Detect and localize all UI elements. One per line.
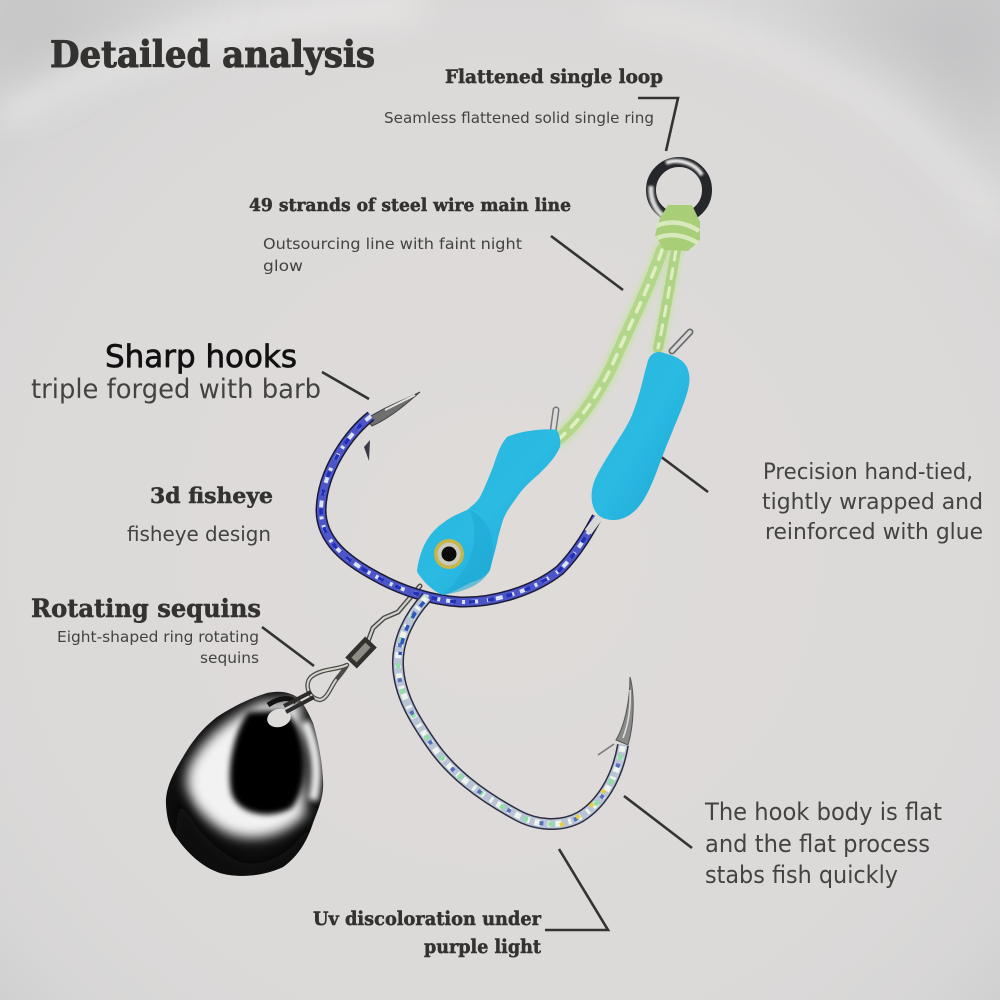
label: flattened single loop <box>384 66 663 127</box>
label: hand-tied <box>762 460 983 545</box>
label: flat hook body: stabs fish quickly <box>705 861 898 889</box>
leader line: sharp hooks <box>322 372 369 399</box>
label: flat hook body <box>704 798 942 889</box>
label: main line: glow <box>263 257 303 275</box>
label: 3d fisheye: fisheye design <box>127 522 271 546</box>
label: hand-tied: tightly wrapped and <box>762 490 983 515</box>
icon: metal loop ring <box>651 161 707 218</box>
icon: blue wrap upper <box>592 352 689 520</box>
label: sharp hooks: triple forged with barb <box>31 374 321 405</box>
label: rotating sequins: Rotating sequins <box>31 594 261 623</box>
label: main line: 49 strands of steel wire main line <box>249 195 571 216</box>
label: rotating sequins: Eight-shaped ring rotating <box>57 628 259 646</box>
leader line: hook body <box>624 796 692 848</box>
label: rotating sequins <box>31 594 261 667</box>
label: flat hook body: The hook body is flat <box>704 798 942 826</box>
leader line: sequins <box>262 627 314 666</box>
leader line: uv <box>545 849 608 930</box>
label: hand-tied: reinforced with glue <box>765 520 983 545</box>
label: main line: Outsourcing line with faint night <box>263 235 522 253</box>
leader line: loop <box>638 98 678 151</box>
label: 3d fisheye <box>127 483 273 546</box>
icon: main line strands <box>560 250 676 438</box>
title: Detailed analysis <box>50 34 375 76</box>
icon: knot <box>655 205 700 251</box>
label: uv discoloration: Uv discoloration under <box>313 908 542 930</box>
icon: spoon blade <box>166 692 324 876</box>
label: uv discoloration <box>313 908 542 958</box>
leader line: main line <box>551 236 623 290</box>
label: flat hook body: and the flat process <box>705 830 930 858</box>
icon: needle stubs <box>553 332 690 432</box>
label: hand-tied: Precision hand-tied, <box>763 460 973 485</box>
icon: blue head with fisheye <box>417 429 560 595</box>
icon: fisheye <box>434 539 464 569</box>
label: flattened single loop: Flattened single loop <box>445 66 663 88</box>
label: 3d fisheye: 3d fisheye <box>150 483 273 508</box>
label: sharp hooks <box>31 339 321 405</box>
label: rotating sequins: sequins <box>200 649 259 667</box>
icon: swivel and wire <box>284 586 420 712</box>
leader line: hand-tied <box>660 456 708 492</box>
label: sharp hooks: Sharp hooks <box>105 339 297 375</box>
label: uv discoloration: purple light <box>424 936 541 958</box>
label: flattened single loop: Seamless flattened solid single ring <box>384 109 654 127</box>
label: main line <box>249 195 571 275</box>
icon: right hook <box>398 597 633 826</box>
icon: left hook <box>321 392 603 602</box>
